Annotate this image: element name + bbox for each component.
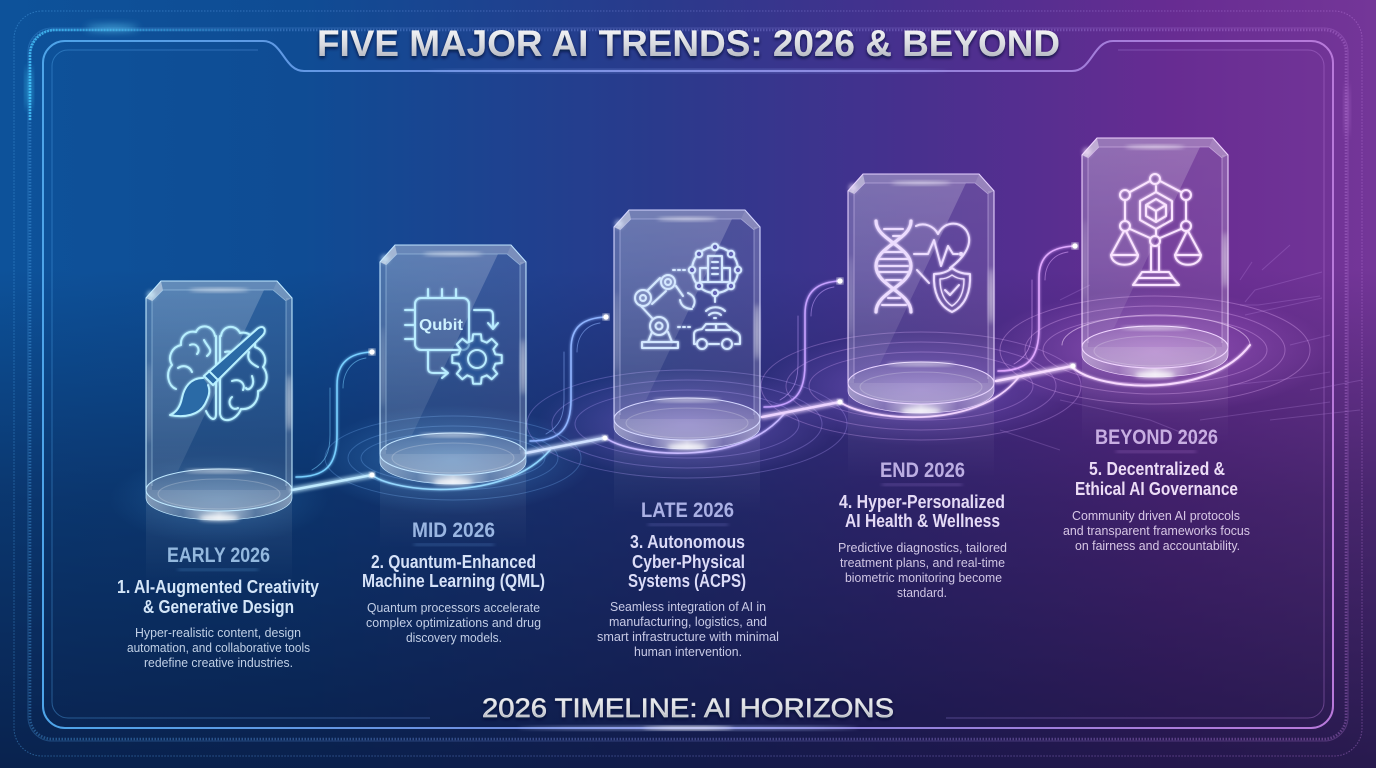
text block 4: End 2026: standard. xyxy=(897,585,947,600)
pedestal 1 with brain and paintbrush icon xyxy=(146,281,292,585)
text block 2: Mid 2026: MID 2026 xyxy=(412,519,495,542)
pedestal 4 with DNA, heart and shield icon xyxy=(848,174,994,478)
text block 2: Mid 2026 xyxy=(362,519,545,645)
text block 3: Late 2026: LATE 2026 xyxy=(641,499,734,522)
text block 3: Late 2026: Seamless integration of AI in xyxy=(610,599,766,614)
text block 1: Early 2026: 1. AI-Augmented Creativity xyxy=(117,577,319,597)
pedestal 2 with quantum chip and gear icon xyxy=(380,245,526,549)
text block 4: End 2026: biometric monitoring become xyxy=(845,570,1002,585)
circuit traces xyxy=(1000,245,1362,450)
pedestal 5 with blockchain network and scales icon xyxy=(1082,138,1228,442)
decorative background glows xyxy=(109,290,1330,545)
text block 1: Early 2026 xyxy=(117,544,319,670)
text block 4: End 2026: END 2026 xyxy=(880,459,965,482)
pedestal 3 with robot arm, smart city and car icon xyxy=(614,210,760,514)
text block 4: End 2026 xyxy=(838,459,1007,600)
text block 2: Mid 2026: discovery models. xyxy=(406,630,502,645)
text block 1: Early 2026: EARLY 2026 xyxy=(167,544,270,567)
text block 3: Late 2026: Cyber-Physical xyxy=(632,552,745,572)
text block 3: Late 2026 xyxy=(597,499,779,659)
text block 1: Early 2026: Hyper-realistic content, design xyxy=(135,625,301,640)
text block 1: Early 2026: redefine creative industries. xyxy=(144,655,293,670)
text block 3: Late 2026: Systems (ACPS) xyxy=(628,571,746,591)
icon: qubit chip and gear xyxy=(405,289,502,384)
text block 2: Mid 2026: complex optimizations and drug xyxy=(366,615,541,630)
text block 3: Late 2026: smart infrastructure with minimal xyxy=(597,629,779,644)
icon: robot arm, city network, connected car xyxy=(635,244,741,349)
text block 5: Beyond 2026: and transparent frameworks focus xyxy=(1063,523,1250,538)
text block 4: End 2026: treatment plans, and real-time xyxy=(840,555,1005,570)
text block 5: Beyond 2026: on fairness and accountability. xyxy=(1075,538,1240,553)
icon label: Qubit: Qubit xyxy=(419,317,464,334)
text block 1: Early 2026: & Generative Design xyxy=(143,597,294,617)
icon: network cube and balance scales xyxy=(1111,174,1201,285)
text block 3: Late 2026: 3. Autonomous xyxy=(630,532,745,552)
text block 5: Beyond 2026: Ethical AI Governance xyxy=(1075,479,1238,499)
footer title: 2026 TIMELINE: AI HORIZONS xyxy=(482,693,894,723)
text block 2: Mid 2026: Quantum processors accelerate xyxy=(367,600,540,615)
icon: brain and paintbrush xyxy=(168,326,267,420)
text block 4: End 2026: 4. Hyper-Personalized xyxy=(839,492,1005,512)
text block 2: Mid 2026: Machine Learning (QML) xyxy=(362,571,545,591)
orbit rings around bases xyxy=(325,296,1310,500)
text block 2: Mid 2026: 2. Quantum-Enhanced xyxy=(371,552,536,572)
text block 4: End 2026: AI Health & Wellness xyxy=(845,511,1000,531)
text block 5: Beyond 2026 xyxy=(1063,426,1250,553)
text block 3: Late 2026: human intervention. xyxy=(634,644,742,659)
text block 5: Beyond 2026: 5. Decentralized & xyxy=(1089,459,1225,479)
text block 5: Beyond 2026: Community driven AI protocols xyxy=(1072,508,1240,523)
text block 4: End 2026: Predictive diagnostics, tailored xyxy=(838,540,1007,555)
timeline: glowing connector segments xyxy=(292,243,1078,490)
text block 5: Beyond 2026: BEYOND 2026 xyxy=(1095,426,1218,449)
text block 3: Late 2026: manufacturing, logistics, and xyxy=(609,614,767,629)
icon: DNA helix, heart pulse, shield xyxy=(876,221,970,312)
text block 1: Early 2026: automation, and collaborative tools xyxy=(127,640,310,655)
title: FIVE MAJOR AI TRENDS: 2026 & BEYOND xyxy=(317,23,1060,64)
